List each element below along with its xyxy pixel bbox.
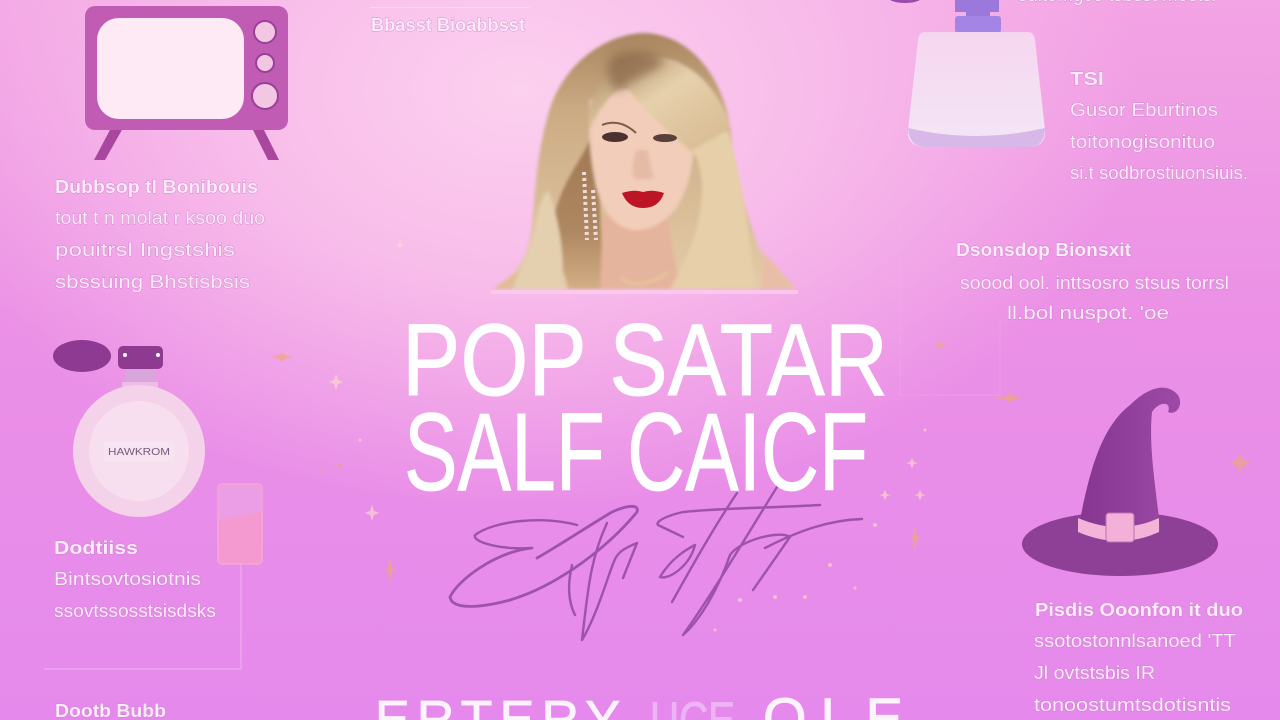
light strip below portrait [491, 290, 798, 294]
text: bag caption [1070, 69, 1248, 183]
text: hat caption: tonoostumtsdotisntis [1034, 695, 1231, 715]
text: centre right caption [956, 240, 1229, 323]
icon: television [85, 6, 288, 160]
title: SALF CAICF [404, 391, 868, 514]
text: tv caption: Dubbsop tl Bonibouis [55, 177, 258, 197]
text: hat caption [1034, 600, 1243, 715]
bottom banner text [375, 686, 903, 720]
earring [584, 172, 596, 240]
title: POP SATAR [402, 303, 888, 417]
text: tv caption [55, 177, 265, 292]
icon: witch hat [1022, 388, 1218, 576]
thin frame lines [44, 225, 1000, 669]
icon: small vial [218, 484, 262, 564]
text: centre right caption: ll.bol nuspot. 'oe [1007, 303, 1169, 323]
text: bag caption: toitonogisonituo [1070, 132, 1215, 152]
text: bag caption: si.t sodbrostiuonsiuis. [1070, 163, 1248, 183]
text: centre right caption: Dsonsdop Bionsxit [956, 240, 1131, 260]
text: hat caption: Jl ovtstsbis IR [1034, 663, 1155, 683]
title [402, 303, 888, 514]
portrait [493, 33, 797, 289]
text: perfume caption: Bintsovtosiotnis [54, 569, 201, 589]
text: hat caption: ssotostonnlsanoed 'TT [1034, 631, 1236, 651]
text: hat caption: Pisdis Ooonfon it duo [1035, 600, 1243, 620]
text: tv caption: pouitrsl Ingstshis [55, 240, 235, 260]
text: centre right caption: soood ool. inttsosro stsus torrsl [960, 273, 1229, 293]
text: perfume caption: Dodtiiss [54, 538, 138, 558]
text: bag caption: Gusor Eburtinos [1070, 100, 1218, 120]
text: perfume caption [54, 538, 216, 621]
icon: perfume bag bottle [889, 0, 1045, 147]
text: top center fragment: Bbasst Bioabbsst [371, 15, 525, 35]
sparkles [271, 240, 1251, 632]
text: bag caption: TSI [1070, 69, 1104, 89]
text: tv caption: tout t n molat r ksoo duo [55, 208, 265, 228]
icon: perfume bottle with atomizer [53, 340, 205, 517]
text: perfume caption: ssovtssosstsisdsks [54, 601, 216, 621]
icon: perfume bottle with atomizer: HAWKROM [108, 447, 170, 458]
signature script [450, 487, 862, 640]
text: tv caption: sbssuing Bhstisbsis [55, 272, 250, 292]
